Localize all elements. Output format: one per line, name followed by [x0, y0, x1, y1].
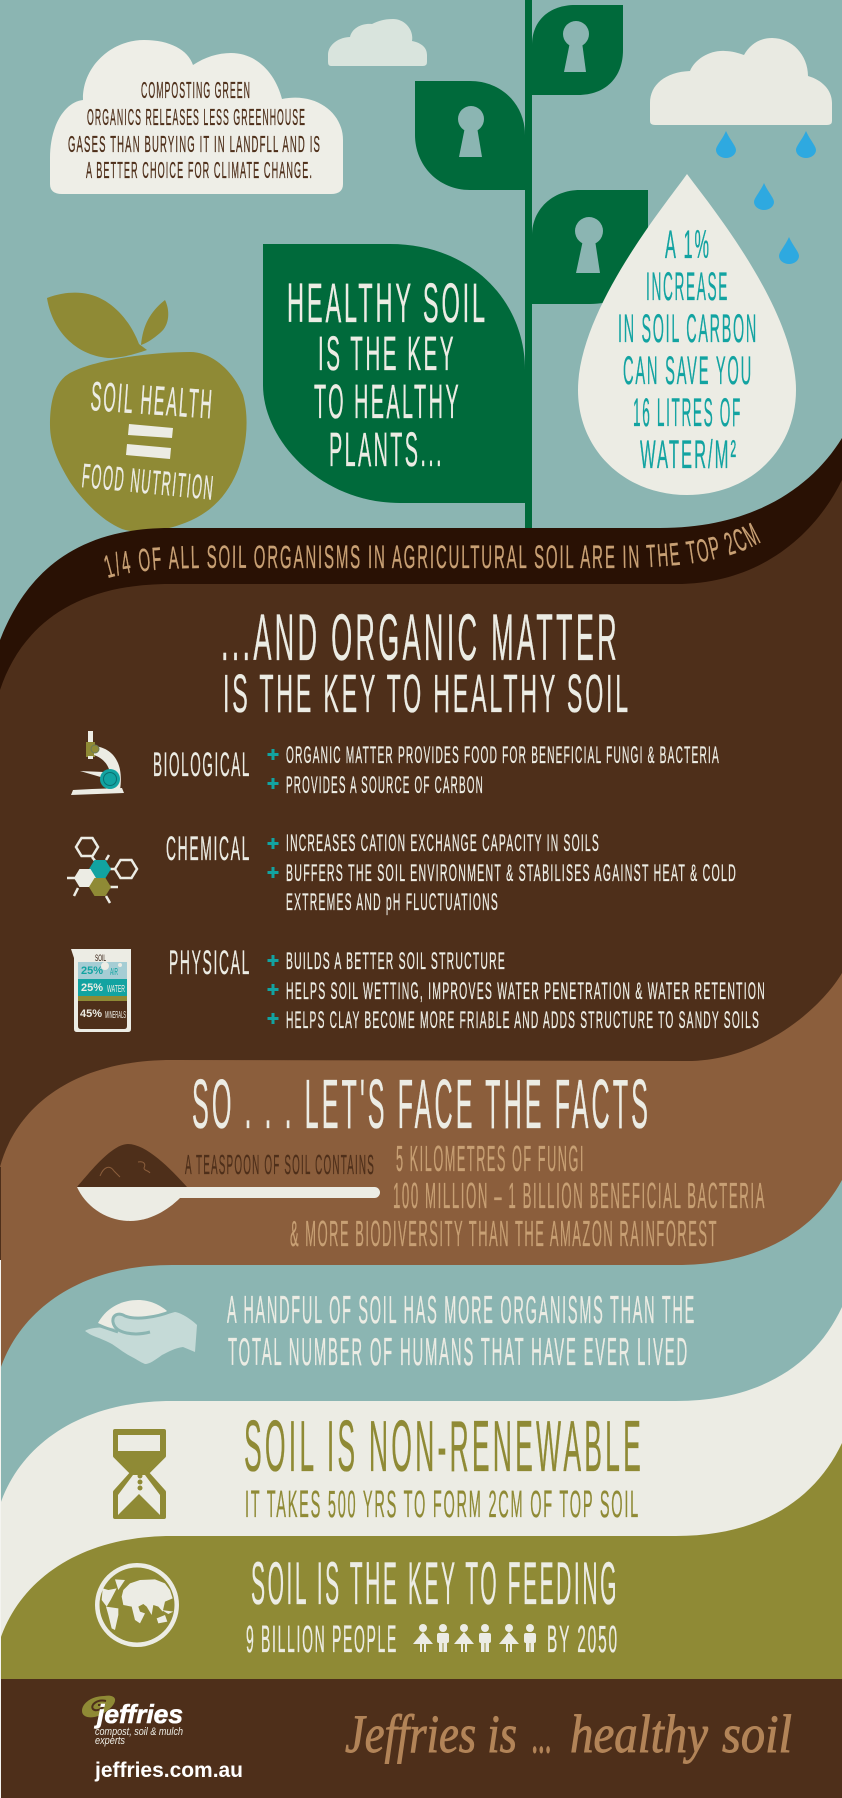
- icon: soil composition beaker: SOIL: [95, 953, 106, 963]
- text: ORGANICS RELEASES LESS GREENHOUSE: [87, 104, 306, 130]
- slogan: Jeffries is: [345, 1704, 517, 1764]
- icon: middle leaf with keyhole: [532, 190, 648, 304]
- icon: soil composition beaker: 45%: [80, 1008, 102, 1020]
- list: chemical benefits: EXTREMES AND pH FLUCTUATIONS: [286, 889, 499, 916]
- text: CHEMICAL: [166, 830, 251, 868]
- plant stem: [525, 0, 532, 529]
- text: BIOLOGICAL: [153, 746, 251, 784]
- text: GASES THAN BURYING IT IN LANDFLL AND IS: [68, 131, 321, 157]
- icon: soil composition beaker: [71, 949, 131, 1032]
- footer bar: [0, 1679, 842, 1798]
- slogan: [345, 1704, 792, 1764]
- slogan: ...: [532, 1704, 552, 1764]
- icon: teaspoon of soil: [77, 1144, 380, 1221]
- curved band text: [104, 522, 761, 578]
- apple: soil health equals food nutrition: [47, 293, 247, 532]
- logo: jeffries: [82, 1696, 183, 1747]
- icon: people: [413, 1624, 536, 1652]
- big leaf: healthy soil heading: IS THE KEY: [318, 328, 456, 381]
- list: physical benefits: BUILDS A BETTER SOIL STRUCTURE: [286, 948, 506, 975]
- big leaf: healthy soil heading: TO HEALTHY: [314, 376, 461, 429]
- icon: rain drops: [716, 131, 816, 264]
- icon: top leaf with keyhole: [532, 5, 623, 95]
- heading: organic matter: [221, 600, 631, 724]
- small cloud: [328, 19, 427, 66]
- left edge strip: [0, 1167, 1, 1798]
- slogan: healthy: [570, 1704, 708, 1764]
- water drop callout: A 1%: [665, 223, 711, 267]
- facts panel: [0, 973, 842, 1400]
- callout: composting cloud: [50, 40, 343, 194]
- text: A TEASPOON OF SOIL CONTAINS: [185, 1149, 375, 1180]
- water drop callout: [578, 174, 796, 495]
- text: FOOD NUTRITION: [80, 457, 216, 508]
- icon: molecule: [67, 838, 137, 903]
- icon: left leaf with keyhole: [415, 81, 525, 190]
- text: HEALTHY SOIL: [287, 271, 488, 334]
- handful panel: [0, 1180, 842, 1520]
- text: 9 BILLION PEOPLE: [246, 1619, 398, 1661]
- icon: soil composition beaker: MINERALS: [105, 1010, 126, 1021]
- dark topsoil band: [0, 438, 842, 800]
- icon: soil composition beaker: AIR: [110, 967, 118, 978]
- feeding panel: [0, 1443, 842, 1680]
- text: SOIL HEALTH: [89, 373, 215, 428]
- text: teaspoon facts: [290, 1138, 766, 1254]
- logo: jeffries: compost, soil & mulch: [95, 1726, 183, 1738]
- list: chemical benefits: [268, 830, 737, 916]
- website url: jeffries.com.au: [94, 1759, 243, 1782]
- icon: soil composition beaker: 25%: [81, 982, 103, 994]
- slogan: soil: [722, 1704, 792, 1764]
- rain cloud: [650, 38, 832, 125]
- non-renewable panel: [0, 1307, 842, 1650]
- organic matter panel: [0, 480, 842, 1200]
- icon: globe: [95, 1563, 179, 1647]
- text: A BETTER CHOICE FOR CLIMATE CHANGE.: [86, 157, 313, 183]
- icon: soil composition beaker: 25%: [81, 965, 103, 977]
- big leaf: healthy soil heading: PLANTS...: [329, 424, 444, 477]
- icon: microscope: [71, 731, 124, 795]
- text: PHYSICAL: [169, 944, 251, 982]
- callout: composting cloud: COMPOSTING GREEN: [141, 77, 251, 103]
- list: physical benefits: [268, 948, 766, 1034]
- icon: soil composition beaker: WATER: [107, 984, 125, 995]
- text: handful of soil: [227, 1289, 696, 1374]
- icon: hand holding soil: [85, 1300, 197, 1364]
- list: biological benefits: PROVIDES A SOURCE OF CARBON: [286, 772, 484, 799]
- icon: hourglass: [115, 1431, 164, 1517]
- heading: non-renewable: [244, 1407, 644, 1526]
- curved band text: 1/4 OF ALL SOIL ORGANISMS IN AGRICULTURAL SOIL ARE IN THE TOP 2CM: [104, 522, 761, 578]
- list: biological benefits: [268, 742, 720, 799]
- logo: jeffries: jeffries: [94, 1699, 183, 1729]
- logo: jeffries: experts: [95, 1735, 125, 1747]
- text: BY 2050: [547, 1619, 619, 1661]
- big leaf: healthy soil heading: [263, 244, 525, 503]
